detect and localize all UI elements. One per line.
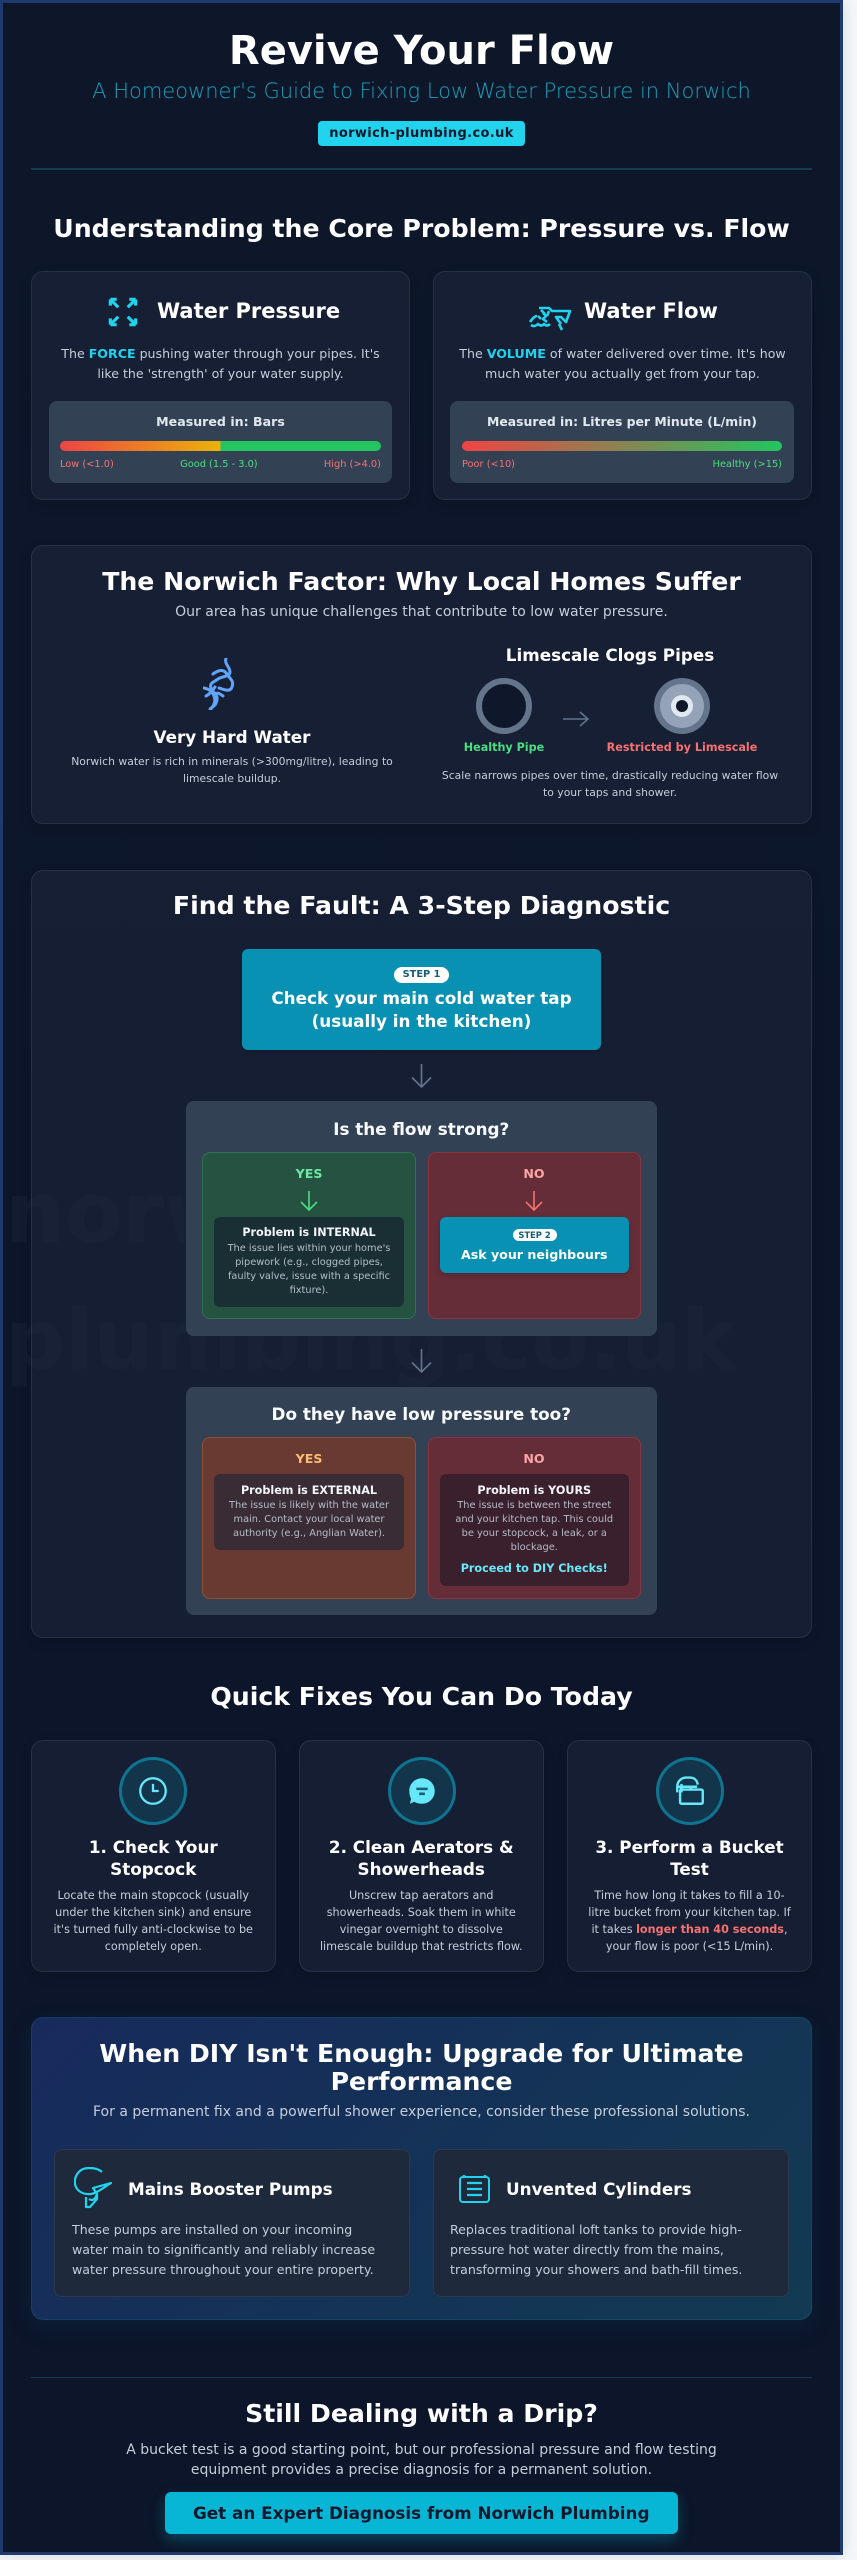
step 2 badge <box>512 1229 556 1241</box>
card: aerators <box>298 1740 544 1972</box>
step 2 text: Ask your neighbours <box>461 1247 608 1262</box>
question 2 <box>186 1387 657 1615</box>
icon: pressure arrows <box>108 298 138 326</box>
description: hard water: limescale buildup. <box>183 772 281 785</box>
subtitle: A Homeowner's Guide to Fixing Low Water Pressure in Norwich <box>92 79 751 103</box>
text: pressure hot water directly from the mains, <box>450 2242 724 2257</box>
panel: water flow <box>433 271 812 500</box>
label: healthy pipe: Healthy Pipe <box>464 741 544 754</box>
step 1 box <box>242 949 601 1050</box>
description: hard water <box>71 755 393 785</box>
panel: water pressure <box>31 271 410 500</box>
intro: Our area has unique challenges that contribute to low water pressure. <box>175 604 668 620</box>
no label: NO <box>523 1451 545 1466</box>
gauge: litres <box>450 401 794 483</box>
option: yes <box>202 1152 416 1319</box>
title <box>329 1837 514 1879</box>
arrow <box>563 712 589 726</box>
text <box>320 1889 523 1953</box>
gauge label: Measured in: Bars <box>156 414 285 429</box>
button: Get an Expert Diagnosis from Norwich Plumbing <box>193 2503 650 2523</box>
card: stopcock <box>31 1740 276 1972</box>
heading: water pressure: Water Pressure <box>157 299 340 323</box>
gauge: bars <box>49 401 392 483</box>
text <box>54 1889 253 1953</box>
panel: upgrade <box>31 2017 812 2320</box>
arrow yes <box>300 1191 318 1211</box>
result text: be your stopcock, a leak, or a <box>462 1528 607 1539</box>
title: Stopcock <box>110 1859 196 1879</box>
result: internal <box>214 1217 404 1307</box>
heading: quick fixes: Quick Fixes You Can Do Today <box>210 1682 633 1711</box>
icon: clock <box>119 1757 187 1825</box>
yes label: YES <box>296 1451 322 1466</box>
card: booster pumps <box>54 2149 410 2297</box>
step 1 text: Check your main cold water tap <box>271 988 572 1008</box>
title <box>89 1837 218 1879</box>
gauge scale: Low (<1.0) <box>60 459 114 470</box>
result text <box>455 1500 613 1553</box>
header <box>31 28 812 170</box>
text <box>72 2222 375 2277</box>
text: limescale buildup that restricts flow. <box>320 1940 523 1953</box>
heading: Performance <box>331 2067 512 2096</box>
result text: authority (e.g., Anglian Water). <box>233 1528 385 1539</box>
result text: blockage. <box>511 1542 558 1553</box>
question 1 text: Is the flow strong? <box>333 1119 509 1139</box>
text: Locate the main stopcock (usually <box>57 1889 249 1902</box>
result text: main. Contact your local water <box>234 1514 384 1525</box>
result: external <box>214 1474 404 1550</box>
icon: restricted pipe <box>654 678 710 734</box>
heading: core problem: Understanding the Core Problem: Pressure vs. Flow <box>53 214 790 243</box>
icon: cylinder <box>459 2175 490 2203</box>
watermark: norwich- <box>5 1164 415 1262</box>
result text: The issue is likely with the water <box>229 1500 389 1511</box>
panel: norwich factor <box>31 545 812 824</box>
text: Unscrew tap aerators and <box>349 1889 494 1902</box>
panel: diagnostic <box>31 870 812 1638</box>
step 1 badge: STEP 1 <box>403 969 440 980</box>
website badge: norwich-plumbing.co.uk <box>329 126 514 141</box>
title: Revive Your Flow <box>229 28 614 74</box>
heading <box>99 2039 744 2096</box>
text: Time how long it takes to fill a 10- <box>594 1889 785 1902</box>
result title: Problem is YOURS <box>477 1484 591 1497</box>
result text: pipework (e.g., clogged pipes, <box>235 1257 383 1268</box>
yes label: YES <box>296 1166 322 1181</box>
text: it's turned fully anti-clockwise to be <box>54 1923 253 1936</box>
result text <box>228 1243 390 1296</box>
text: showerheads. Soak them in white <box>327 1906 516 1919</box>
icon: pump <box>74 2167 112 2208</box>
proceed link: Proceed to DIY Checks! <box>461 1562 608 1575</box>
option: yes <box>202 1437 416 1599</box>
arrow down <box>412 1064 432 1088</box>
option: no <box>428 1437 640 1599</box>
text: it takes longer than 40 seconds, <box>591 1923 788 1936</box>
text <box>450 2222 742 2277</box>
title: 2. Clean Aerators & <box>329 1837 514 1857</box>
text: litre bucket from your kitchen tap. If <box>588 1906 791 1919</box>
button <box>164 2492 678 2534</box>
description: like the 'strength' of your water supply. <box>97 366 344 381</box>
title: 3. Perform a Bucket <box>595 1837 784 1857</box>
title: Showerheads <box>358 1859 485 1879</box>
description <box>61 346 380 381</box>
text: A bucket test is a good starting point, but our professional pressure and flow testing <box>126 2442 717 2458</box>
watermark: plumbing.co.uk <box>5 1291 737 1389</box>
website badge <box>318 121 525 146</box>
intro: For a permanent fix and a powerful shower experience, consider these professional solutions. <box>93 2104 750 2120</box>
gauge scale <box>462 459 782 470</box>
label: restricted: Restricted by Limescale <box>607 741 757 754</box>
title: Test <box>670 1859 709 1879</box>
question 1 <box>186 1101 657 1336</box>
result text <box>228 1500 390 1539</box>
icon: healthy pipe <box>476 678 532 734</box>
subheading: very hard water: Very Hard Water <box>154 727 310 747</box>
icon: hard water <box>203 658 234 710</box>
result text: fixture). <box>290 1285 328 1296</box>
result text: The issue is between the street <box>457 1500 611 1511</box>
text <box>126 2442 717 2478</box>
text: under the kitchen sink) and ensure <box>55 1906 251 1919</box>
text: water pressure throughout your entire property. <box>72 2262 374 2277</box>
no label: NO <box>523 1166 545 1181</box>
text: completely open. <box>105 1940 202 1953</box>
text: water main to significantly and reliably increase <box>72 2242 375 2257</box>
description: limescale <box>442 769 778 799</box>
step 1 badge <box>394 967 449 983</box>
text: equipment provides a precise diagnosis for a permanent solution. <box>191 2462 652 2478</box>
step 1 text: (usually in the kitchen) <box>312 1011 531 1031</box>
description: The FORCE pushing water through your pipes. It's <box>61 346 380 361</box>
result text: faulty valve, issue with a specific <box>228 1271 390 1282</box>
result text: and your kitchen tap. This could <box>455 1514 613 1525</box>
gauge scale: Good (1.5 - 3.0) <box>180 459 258 470</box>
gauge scale: Healthy (>15) <box>713 459 782 470</box>
title <box>595 1837 784 1879</box>
text <box>588 1889 791 1953</box>
step 1 text <box>271 988 572 1031</box>
description: hard water: Norwich water is rich in minerals (>300mg/litre), leading to <box>71 755 393 768</box>
text: These pumps are installed on your incoming <box>72 2222 352 2237</box>
description <box>459 346 786 381</box>
title: 1. Check Your <box>89 1837 218 1857</box>
text: Replaces traditional loft tanks to provide high- <box>450 2222 742 2237</box>
icon: bucket <box>656 1757 724 1825</box>
icon: filter bubble <box>388 1757 456 1825</box>
heading: Find the Fault: A 3-Step Diagnostic <box>173 891 670 920</box>
gauge bar <box>462 441 782 451</box>
icon: flow <box>529 306 572 331</box>
call to action <box>31 2377 812 2542</box>
description: limescale: Scale narrows pipes over time, drastically reducing water flow <box>442 769 778 782</box>
option: no <box>428 1152 640 1319</box>
card: bucket test <box>567 1740 812 1972</box>
result title: Problem is INTERNAL <box>242 1226 376 1239</box>
question 2 text: Do they have low pressure too? <box>272 1404 571 1424</box>
gauge scale: High (>4.0) <box>324 459 381 470</box>
gauge bar <box>60 441 381 451</box>
heading: Still Dealing with a Drip? <box>245 2399 598 2428</box>
title: Unvented Cylinders <box>506 2179 691 2199</box>
subheading: limescale: Limescale Clogs Pipes <box>506 645 714 665</box>
arrow no <box>526 1191 542 1211</box>
description: limescale: to your taps and shower. <box>543 786 677 799</box>
heading: When DIY Isn't Enough: Upgrade for Ultimate <box>99 2039 744 2068</box>
step 2 box <box>440 1217 629 1273</box>
result text: The issue lies within your home's <box>228 1243 390 1254</box>
text: transforming your showers and bath-fill times. <box>450 2262 742 2277</box>
title: Mains Booster Pumps <box>128 2179 333 2199</box>
watermark <box>5 1150 785 1404</box>
text: your flow is poor (<15 L/min). <box>606 1940 773 1953</box>
gauge scale <box>60 459 381 470</box>
result title: Problem is EXTERNAL <box>241 1484 377 1497</box>
heading: water flow: Water Flow <box>584 299 718 323</box>
heading: The Norwich Factor: Why Local Homes Suffer <box>102 567 741 596</box>
gauge scale: Poor (<10) <box>462 459 515 470</box>
description: much water you actually get from your tap. <box>485 366 760 381</box>
result: yours <box>440 1474 629 1586</box>
card: unvented cylinders <box>433 2149 788 2297</box>
step 2 badge: STEP 2 <box>518 1230 551 1240</box>
arrow down <box>412 1349 432 1373</box>
text: vinegar overnight to dissolve <box>340 1923 503 1936</box>
gauge label: Measured in: Litres per Minute (L/min) <box>487 414 757 429</box>
description: The VOLUME of water delivered over time. It's how <box>459 346 786 361</box>
